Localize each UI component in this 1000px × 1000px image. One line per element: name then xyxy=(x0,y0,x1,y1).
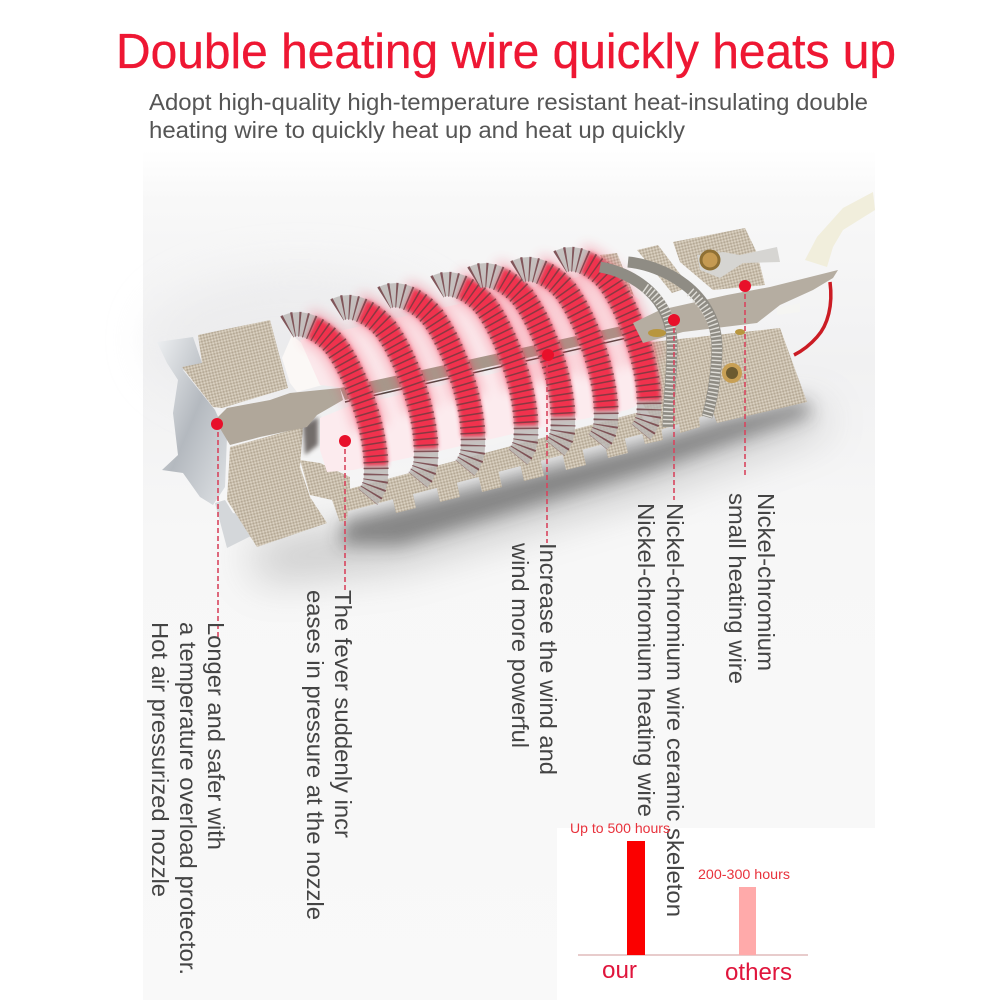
nozzle disc xyxy=(157,337,227,505)
callout: nozzle: Hot air pressurized nozzle xyxy=(147,622,173,897)
soft shadow xyxy=(250,405,830,580)
background halo xyxy=(150,270,450,410)
red wire xyxy=(794,282,831,355)
callout: ceramic skeleton: Nickel-chromium heating wire xyxy=(633,503,659,817)
bar: our xyxy=(627,841,645,955)
bar: others xyxy=(739,887,756,955)
callout: wind xyxy=(507,542,561,775)
screw terminal xyxy=(697,247,780,278)
callout: nozzle xyxy=(147,622,229,975)
lower ceramic bar xyxy=(320,340,657,472)
label: 200-300 hours: 200-300 hours xyxy=(698,866,790,882)
white connection wire xyxy=(805,192,875,267)
callout: small heating wire xyxy=(724,493,779,684)
brass nut xyxy=(701,251,719,269)
white insulation xyxy=(777,303,800,315)
upper left cloth plate xyxy=(182,320,288,408)
callout: nozzle: a temperature overload protector. xyxy=(175,622,201,975)
callout: small heating wire: Nickel-chromium xyxy=(753,493,779,671)
title: Double heating wire quickly heats up xyxy=(116,25,896,79)
subtitle: heating wire to quickly heat up and heat up quickly xyxy=(149,117,686,143)
heating coils xyxy=(287,259,649,497)
brass eyelet xyxy=(724,365,740,381)
small heating wires xyxy=(600,262,717,427)
callout: wind: Increase the wind and xyxy=(535,543,561,775)
central blade right xyxy=(633,270,838,343)
photo background xyxy=(143,150,875,1000)
mid cloth tab xyxy=(300,460,350,522)
central blade left xyxy=(215,388,343,445)
central blade middle xyxy=(340,322,640,400)
callout: ceramic skeleton: Nickel-chromium wire ceramic skeleton xyxy=(662,503,688,917)
nozzle lower tab xyxy=(215,500,257,548)
lower left cloth plate xyxy=(227,427,327,547)
label: up to 500 hours: Up to 500 hours xyxy=(570,820,670,836)
subtitle: Adopt high-quality high-temperature resistant heat-insulating double xyxy=(149,89,868,115)
heater illustration xyxy=(157,192,875,580)
subtitle xyxy=(149,89,868,143)
blade shadow line xyxy=(345,335,640,402)
callout: fever xyxy=(302,590,356,920)
cloth slats xyxy=(640,393,700,444)
label: others: others xyxy=(725,959,792,986)
callout leader lines xyxy=(218,286,745,640)
callout: nozzle: Longer and safer with xyxy=(203,622,229,850)
bar chart: lifespan xyxy=(570,820,808,986)
callout: fever: The fever suddenly incr xyxy=(330,590,356,838)
upper right cloth plates xyxy=(600,228,765,305)
lower cloth slats xyxy=(392,435,628,513)
callout: wind: wind more powerful xyxy=(507,542,533,748)
dark gap at blade xyxy=(303,417,318,455)
upper ceramic bar xyxy=(300,272,640,388)
lower cloth strip xyxy=(345,412,650,512)
left ceramic xyxy=(282,335,330,392)
contact shadow xyxy=(340,400,812,545)
label: our: our xyxy=(602,957,637,984)
callout: ceramic skeleton xyxy=(633,503,688,917)
callout dots xyxy=(211,280,751,447)
lower right cloth plate xyxy=(640,328,807,430)
callout: small heating wire: small heating wire xyxy=(724,493,750,684)
brass rivets xyxy=(648,329,745,337)
callout: fever: eases in pressure at the nozzle xyxy=(302,590,328,920)
chart background xyxy=(557,828,875,1000)
